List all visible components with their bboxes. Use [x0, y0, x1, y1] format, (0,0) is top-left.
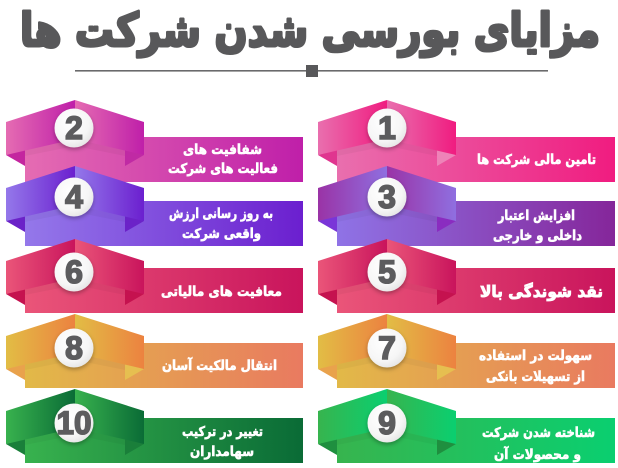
item 5: [318, 239, 615, 313]
item 4: 4: [65, 179, 83, 215]
item 10: تغییر در ترکیب: [182, 424, 263, 440]
item 7: 7: [378, 330, 396, 366]
item 3: 3: [378, 179, 396, 215]
item 2: فعالیت های شرکت: [168, 161, 278, 177]
item 5: 5: [378, 254, 396, 290]
title underline: [75, 65, 548, 77]
item 7: از تسهیلات بانکی: [486, 369, 585, 385]
item 6: معافیت های مالیاتی: [161, 284, 282, 300]
item 9: شناخته شدن شرکت: [482, 425, 595, 441]
item 10: 10: [56, 405, 92, 441]
item 5: نقد شوندگی بالا: [480, 282, 603, 301]
item 1: 1: [378, 110, 396, 146]
item 3: [318, 166, 615, 246]
item 2: شفافیت های: [183, 142, 262, 158]
item 2: [6, 100, 303, 182]
item 3: داخلی و خارجی: [493, 228, 582, 244]
item 3: افزایش اعتبار: [497, 208, 575, 224]
item 9: و محصولات آن: [494, 446, 581, 463]
item 8: انتقال مالکیت آسان: [162, 357, 277, 374]
item 6: 6: [65, 254, 83, 290]
item 8: 8: [65, 330, 83, 366]
item 9: [318, 389, 615, 463]
item 10: [6, 389, 303, 463]
item 4: [6, 166, 303, 246]
item 8: [6, 314, 303, 388]
item 1: [318, 100, 615, 182]
item 10: سهامداران: [190, 444, 254, 460]
item 2: 2: [65, 110, 83, 146]
item 9: 9: [378, 405, 396, 441]
item 6: [6, 239, 303, 313]
item 7: سهولت در استفاده: [479, 348, 592, 364]
item 4: واقعی شرکت: [182, 226, 261, 242]
item 7: [318, 314, 615, 388]
item 4: به روز رسانی ارزش: [169, 206, 273, 222]
item 1: تامین مالی شرکت ها: [477, 152, 596, 168]
